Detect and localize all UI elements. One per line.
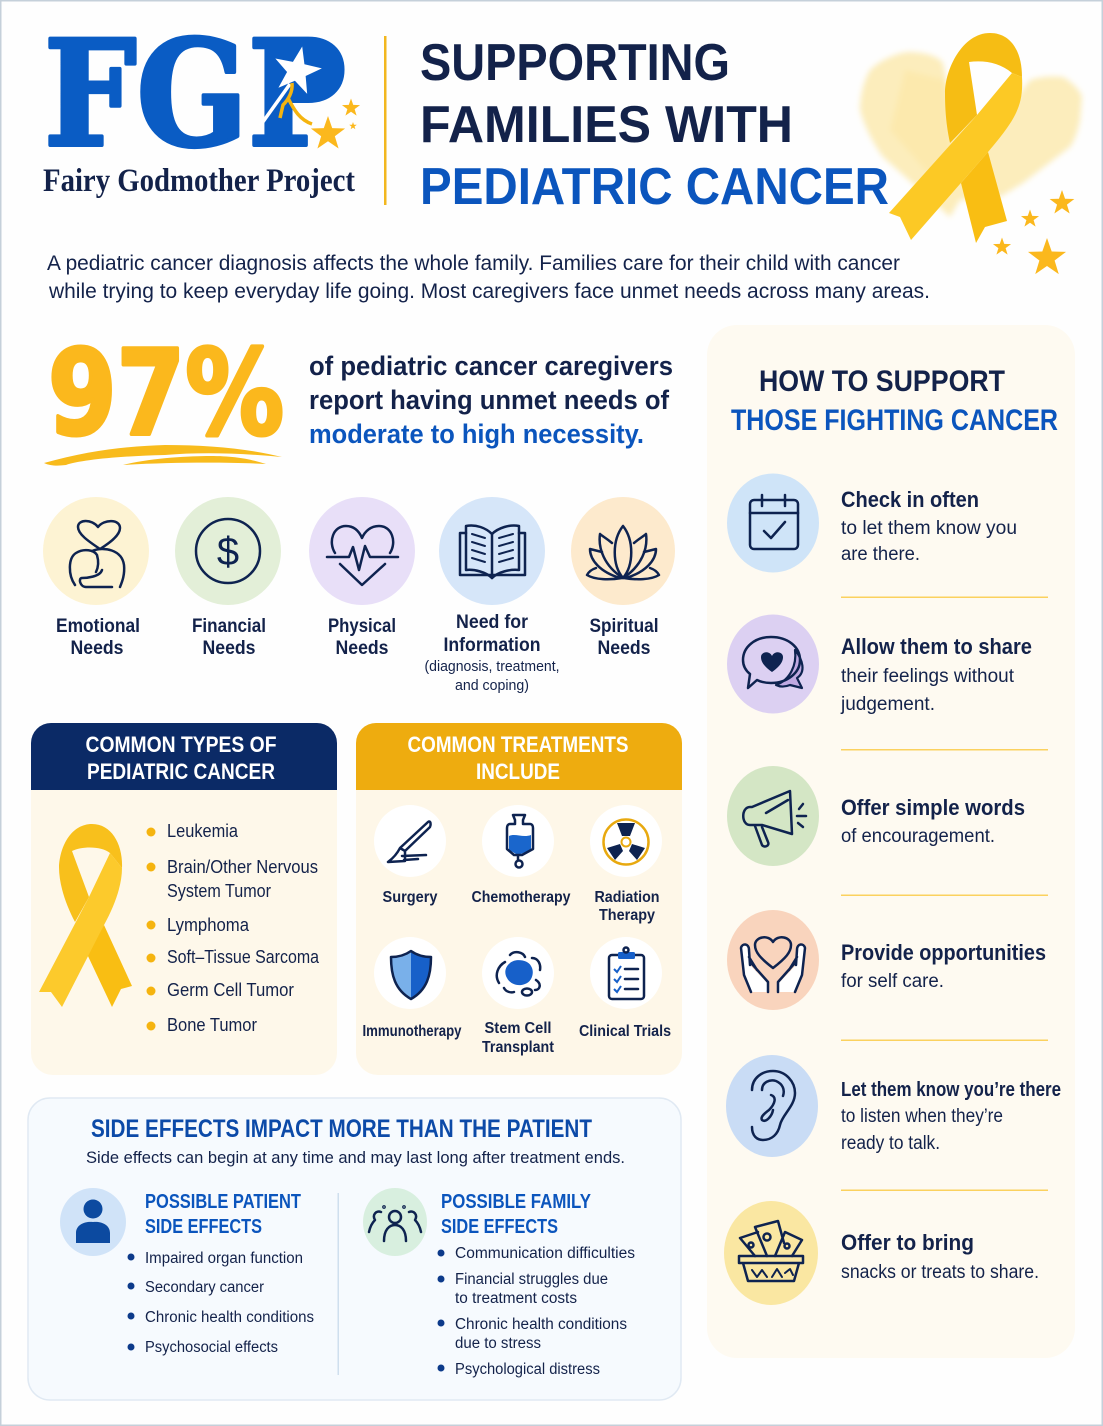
statistic description: of pediatric cancer caregivers [309, 351, 673, 381]
statistic description: moderate to high necessity. [309, 419, 644, 449]
tip: listen: Let them know you’re there [841, 1079, 1061, 1101]
family side effects column: Communication difficulties [455, 1245, 635, 1262]
intro text: while trying to keep everyday life going. Most caregivers face unmet needs across many areas. [48, 280, 930, 303]
patient side effects column: Chronic health conditions [145, 1309, 314, 1326]
treatment: surgery: Surgery [382, 889, 438, 906]
family side effects column: due to stress [455, 1335, 541, 1352]
ribbon [889, 33, 1022, 243]
ribbon [39, 824, 132, 1007]
patient side effects column: Impaired organ function [145, 1250, 303, 1267]
family side effects column: POSSIBLE FAMILY [441, 1191, 592, 1213]
tip: simple words: of encouragement. [841, 826, 995, 847]
title: FAMILIES WITH [420, 96, 793, 154]
need: information: Information [444, 635, 540, 656]
need: financial: Financial [192, 616, 266, 637]
need: information: and coping) [455, 678, 529, 694]
panel header [31, 723, 337, 790]
patient side effects column: SIDE EFFECTS [145, 1216, 262, 1238]
tip: bring snacks [724, 1201, 1039, 1305]
treatment: radiation therapy [590, 805, 662, 924]
family side effects column: SIDE EFFECTS [441, 1216, 558, 1238]
panel header: COMMON TREATMENTS [408, 732, 628, 757]
treatment: immunotherapy [362, 937, 462, 1040]
need: spiritual: Spiritual [590, 616, 658, 637]
panel header [356, 723, 682, 790]
logo letters FGP: FGP [44, 9, 346, 180]
tip: self care: Provide opportunities [841, 940, 1046, 965]
treatment: immunotherapy: Immunotherapy [362, 1023, 462, 1040]
tip: check in often: are there. [841, 544, 920, 565]
tip: listen: to listen when they’re [841, 1106, 1003, 1127]
statistic description [309, 351, 673, 449]
panel heading: HOW TO SUPPORT [759, 365, 1005, 398]
logo name: Fairy Godmother Project [43, 163, 355, 199]
tip: allow them to share: Allow them to share [841, 634, 1032, 659]
icon: megaphone [727, 766, 819, 866]
title [420, 34, 889, 216]
tip: self care: for self care. [841, 971, 944, 992]
icon: calendar [727, 474, 819, 572]
treatment: surgery [374, 805, 446, 906]
need: emotional [43, 497, 149, 659]
family side effects column: to treatment costs [455, 1290, 577, 1307]
need: physical: Needs [336, 638, 388, 659]
title: SUPPORTING [420, 34, 730, 92]
panel: common treatments [356, 723, 682, 1075]
need: emotional: Emotional [56, 616, 140, 637]
patient side effects column: POSSIBLE PATIENT [145, 1191, 301, 1213]
icon: logo stars [311, 98, 360, 149]
family side effects column [363, 1188, 635, 1378]
need: financial: Needs [202, 638, 256, 659]
tip: listen: ready to talk. [841, 1133, 940, 1154]
intro text: A pediatric cancer diagnosis affects the whole family. Families care for their child with cancer [47, 252, 900, 275]
treatment: chemotherapy: Chemotherapy [472, 889, 571, 906]
tip: allow them to share [727, 614, 1032, 715]
need: information [424, 497, 560, 694]
cancer type list: Brain/Other Nervous [167, 857, 318, 877]
cancer type list: Leukemia [167, 821, 239, 841]
icon: family [363, 1188, 427, 1256]
tip: allow them to share: their feelings without [841, 666, 1015, 687]
patient side effects column: Secondary cancer [145, 1279, 264, 1296]
cancer type list: Germ Cell Tumor [167, 980, 294, 1000]
need: information: (diagnosis, treatment, [424, 659, 560, 675]
tip: check in often [727, 474, 1017, 572]
family side effects column: Financial struggles due [455, 1271, 608, 1288]
needs icons row [43, 497, 675, 694]
icon: speech bubbles [727, 614, 819, 714]
cancer type list: Bone Tumor [167, 1015, 257, 1035]
intro text [47, 252, 930, 303]
need: financial: $ [217, 530, 239, 574]
panel: common types of pediatric cancer [31, 723, 337, 1075]
need: financial [175, 497, 281, 659]
need: physical [309, 497, 415, 659]
patient side effects column: Psychosocial effects [145, 1339, 278, 1356]
underline swoosh [44, 445, 282, 466]
logo: Fairy Godmother Project [43, 9, 360, 199]
title: PEDIATRIC CANCER [420, 158, 889, 216]
treatment: radiation therapy: Radiation [594, 889, 660, 906]
patient side effects column [60, 1188, 314, 1356]
tip: check in often: to let them know you [841, 518, 1017, 539]
treatment: stem cell transplant: Stem Cell [484, 1020, 552, 1037]
panel: side effects [28, 1098, 681, 1400]
family side effects column: Chronic health conditions [455, 1316, 627, 1333]
icon: magic wand [260, 42, 325, 126]
icon: ear [726, 1055, 818, 1157]
painted heart [860, 52, 1082, 217]
icon: person [60, 1188, 126, 1256]
cancer type list: System Tumor [167, 881, 271, 901]
tip: simple words: Offer simple words [841, 795, 1025, 820]
tip: bring snacks: snacks or treats to share. [841, 1262, 1039, 1283]
tip: self care [727, 910, 1046, 1010]
cancer type list: Lymphoma [167, 915, 250, 935]
statistic: 97%: 97% [48, 324, 284, 462]
treatment: stem cell transplant [482, 937, 555, 1056]
need: physical: Physical [328, 616, 396, 637]
treatment: clinical trials [579, 937, 671, 1040]
family side effects column: Psychological distress [455, 1361, 600, 1378]
panel subtitle: Side effects can begin at any time and may last long after treatment ends. [86, 1148, 625, 1167]
stars [993, 190, 1074, 274]
panel: how to support [707, 325, 1075, 1358]
cancer type list: Soft–Tissue Sarcoma [167, 947, 320, 967]
tip: simple words [727, 766, 1025, 866]
cancer type list [146, 821, 320, 1035]
panel header: INCLUDE [476, 759, 560, 784]
icon: hands with heart [727, 910, 819, 1010]
need: emotional: Needs [70, 638, 124, 659]
panel header: COMMON TYPES OF [86, 732, 276, 757]
icon: snack basket [724, 1201, 818, 1305]
tip: listen [726, 1055, 1061, 1157]
treatment: stem cell transplant: Transplant [482, 1039, 555, 1056]
need: spiritual [571, 497, 675, 659]
statistic description: report having unmet needs of [309, 385, 670, 415]
treatment: clinical trials: Clinical Trials [579, 1023, 671, 1040]
tip: bring snacks: Offer to bring [841, 1230, 974, 1255]
need: spiritual: Needs [598, 638, 650, 659]
illustration: yellow ribbon over painted heart with stars [860, 33, 1082, 274]
panel heading [731, 365, 1058, 437]
need: information: Need for [456, 612, 529, 633]
treatment: radiation therapy: Therapy [599, 907, 655, 924]
tip: check in often: Check in often [841, 487, 979, 512]
panel header: PEDIATRIC CANCER [87, 759, 275, 784]
panel heading: SIDE EFFECTS IMPACT MORE THAN THE PATIENT [91, 1115, 592, 1143]
treatment: chemotherapy [472, 805, 571, 906]
tip: allow them to share: judgement. [840, 694, 935, 715]
